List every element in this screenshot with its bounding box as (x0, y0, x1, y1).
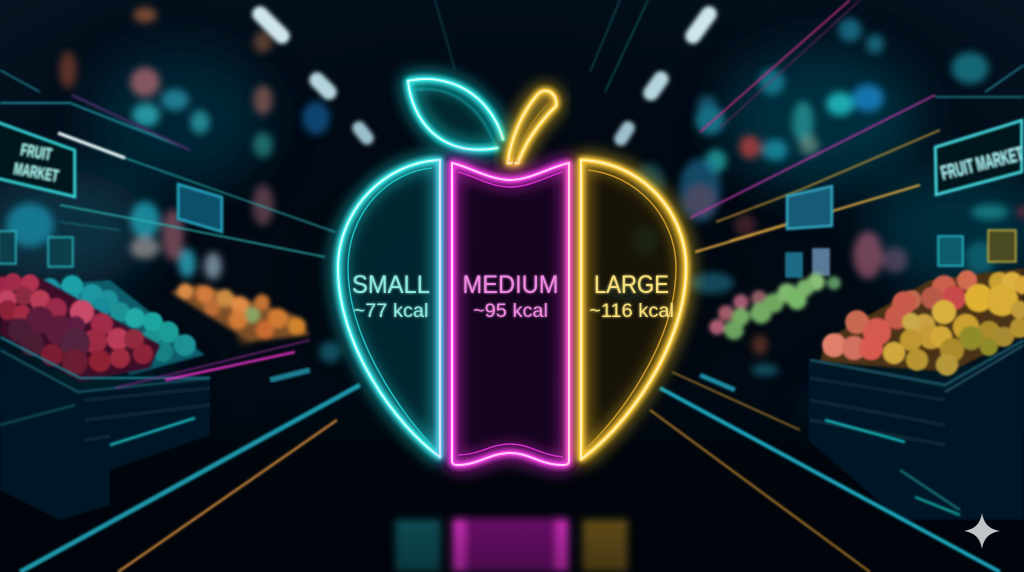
right stall shelf structure (808, 340, 1024, 520)
stall haze (0, 50, 1024, 480)
panel: medium (452, 163, 569, 465)
bokeh lights (6, 7, 1024, 376)
floor (0, 400, 1024, 572)
label: medium (462, 271, 558, 322)
right small signs (785, 186, 1016, 278)
floor light streaks (20, 372, 1000, 572)
teal fruit, left shelf (40, 275, 205, 375)
left neon sign: FRUIT MARKET (0, 121, 75, 197)
left stall shelf structure (0, 345, 210, 520)
thin light rays above apple (435, 0, 648, 92)
leaf (408, 78, 503, 150)
label: small: ~77 kcal (354, 300, 428, 322)
left stall canopy (0, 70, 335, 257)
right stall canopy (690, 0, 1024, 252)
apple (338, 78, 686, 465)
left small signs (0, 184, 222, 267)
stem (508, 91, 556, 165)
left neon sign: FRUIT MARKET: FRUIT (19, 140, 54, 164)
right stall rails and crates (700, 340, 1024, 515)
left stall rails and crates (0, 337, 310, 464)
icon: sparkle watermark (964, 513, 1000, 549)
label: large (589, 271, 674, 322)
right market stall (690, 0, 1024, 520)
right neon sign: FRUIT MARKET: FRUIT MARKET (939, 143, 1024, 185)
ceiling light bars (260, 14, 709, 139)
red and yellow fruit, right shelf (820, 268, 1024, 376)
panel: large (581, 160, 686, 459)
left market stall (0, 70, 335, 520)
right neon sign: FRUIT MARKET (935, 120, 1024, 195)
label: large: ~116 kcal (589, 300, 674, 322)
left neon sign: FRUIT MARKET: MARKET (12, 159, 60, 185)
label: medium: MEDIUM (462, 271, 558, 299)
label: medium: ~95 kcal (473, 300, 548, 322)
panel: small (338, 160, 440, 457)
label: small (352, 271, 430, 322)
green fruit, right back shelf (709, 273, 841, 340)
orange fruit, left back shelf (170, 283, 310, 342)
label: small: SMALL (352, 271, 430, 299)
label: large: LARGE (594, 271, 669, 299)
floor reflection of apple (395, 516, 628, 572)
red apples, left shelf (0, 273, 160, 382)
